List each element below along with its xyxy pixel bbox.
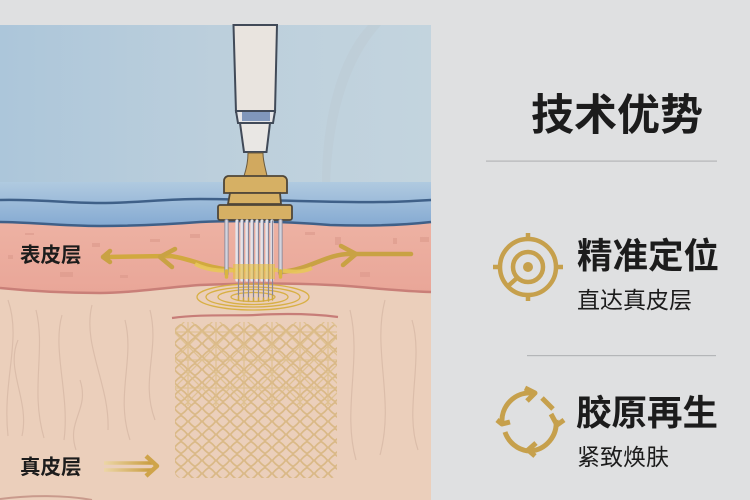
gold head base — [218, 205, 292, 220]
subtitle: firming skin: 紧致焕肤 — [577, 444, 669, 470]
surface line 2 — [0, 221, 431, 226]
right arrow — [280, 246, 411, 272]
nozzle — [240, 123, 270, 152]
blue surface band — [0, 182, 431, 226]
left arrow — [103, 249, 232, 270]
icon: target — [493, 233, 563, 301]
collagen mesh — [175, 322, 337, 478]
item divider — [527, 355, 716, 356]
collagen boundary line — [172, 314, 338, 318]
icon: cycle arrows — [497, 388, 564, 456]
dermis arrow — [104, 456, 157, 476]
gold head top — [224, 176, 287, 193]
dermis label: 真皮层 — [20, 455, 82, 479]
collar — [236, 111, 275, 123]
bottom skin curve — [0, 496, 92, 500]
advantage 2: collagen regeneration — [497, 388, 718, 470]
glow stream — [195, 264, 312, 272]
dermis layer — [0, 280, 431, 500]
surface line 1 — [0, 199, 431, 203]
epidermis label: 表皮层 — [20, 244, 82, 267]
heading: 技术优势 — [531, 92, 703, 140]
subtitle: reaches dermis: 直达真皮层 — [577, 287, 692, 313]
epidermis specks — [8, 232, 429, 278]
glow rings around needles — [197, 284, 309, 310]
gold head middle — [228, 193, 281, 204]
title: precise targeting: 精准定位 — [577, 236, 719, 276]
dermis fibres — [7, 300, 418, 460]
gold neck — [244, 153, 267, 176]
panel: technology advantages — [486, 92, 719, 470]
title: collagen regeneration: 胶原再生 — [576, 393, 718, 433]
panel: skin cross-section — [0, 25, 431, 500]
needles — [226, 221, 280, 301]
heading divider — [486, 160, 717, 162]
handle — [234, 25, 277, 112]
epidermis boundary line — [0, 284, 431, 293]
epidermis layer — [0, 215, 431, 293]
advantage 1: precise targeting — [493, 233, 719, 313]
air background — [0, 25, 431, 185]
device: microneedle applicator — [195, 25, 312, 301]
